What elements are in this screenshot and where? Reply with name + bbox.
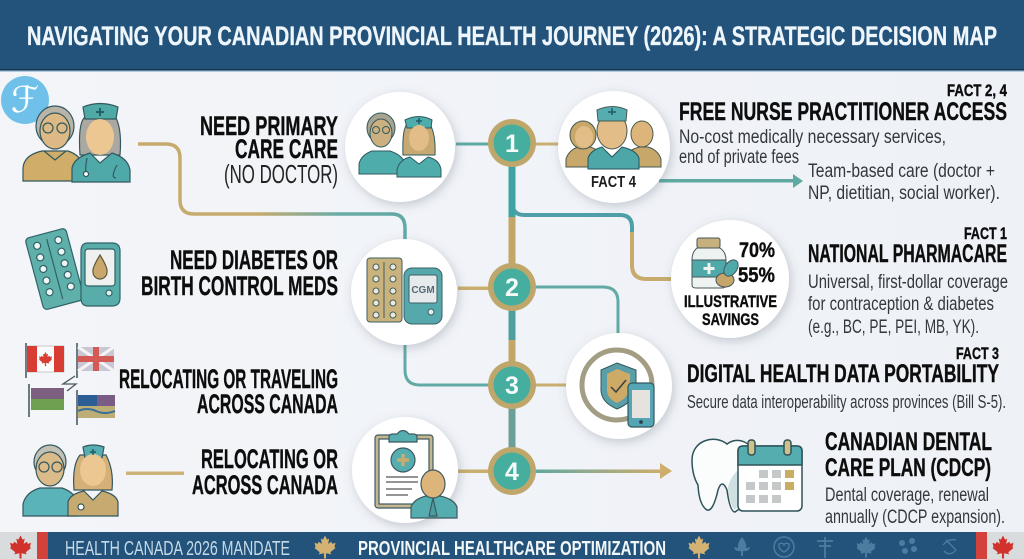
savings figures: 55%: [738, 264, 775, 287]
circle: care team fact 4: [558, 91, 670, 203]
connector: node 1 to fact 4 circle: [534, 142, 560, 146]
heading: need primary care: (NO DOCTOR): [224, 159, 338, 189]
icon: gold maple leaf right: [688, 535, 710, 559]
spine: [508, 165, 516, 450]
icon: blister and CGM: [367, 258, 442, 324]
header banner: [0, 0, 1024, 72]
circle: clipboard: [352, 417, 458, 523]
node 1: 1: [505, 130, 519, 158]
node 3: 3: [505, 372, 519, 400]
heading: relocating or across canada: ACROSS CANADA: [192, 470, 338, 500]
savings figures: SAVINGS: [702, 310, 759, 329]
text block: free nurse practitioner access: end of private fees: [679, 147, 799, 168]
savings figures: 70%: [739, 239, 775, 262]
heading: relocating or traveling: ACROSS CANADA: [197, 389, 338, 419]
node 2: 2: [505, 274, 519, 302]
text block: national pharmacare: FACT 1: [964, 224, 1007, 243]
logo badge: ℱ: [11, 80, 39, 121]
connector: row 4 left line: [126, 472, 184, 475]
icon: left maple leaf: [10, 535, 31, 559]
circle: digital data: [566, 333, 672, 439]
node 4: [488, 447, 536, 495]
heading: diabetes or birth control: BIRTH CONTROL MEDS: [141, 271, 338, 301]
heading: diabetes or birth control: [141, 245, 338, 301]
icon: clipboard with patient: [375, 430, 457, 518]
connector: circle 2 to node 2: [458, 286, 492, 290]
icon: elder and nurse, row 4: [23, 445, 118, 516]
heading: diabetes or birth control: NEED DIABETES OR: [170, 245, 338, 275]
fact 4 label: FACT 4: [591, 174, 636, 191]
flag: Ontario style: [78, 347, 114, 371]
icon: tooth and calendar: [692, 439, 802, 512]
node 2: [488, 263, 536, 311]
connector: circle 2 down to node 3: [405, 344, 492, 385]
icon: provincial flags: [25, 343, 115, 425]
text block: free nurse practitioner access: [679, 81, 1007, 204]
icon: care team: [566, 106, 661, 169]
savings figures: ILLUSTRATIVE: [684, 292, 777, 311]
connector: spine branch to pharmacare: [512, 205, 672, 279]
arrow: fact 4 to team-based care: [659, 174, 803, 188]
flag: Alberta style: [31, 388, 64, 410]
exchange bolt: [63, 376, 76, 391]
text block: canadian dental care plan: [825, 428, 1005, 528]
heading: need primary care: [200, 111, 338, 189]
icon: elder and nurse: [359, 113, 441, 177]
text block: digital health data portability: FACT 3: [956, 344, 999, 363]
heading: relocating or traveling: [119, 364, 338, 419]
savings figures: [684, 239, 777, 329]
icon: right maple leaf: [992, 535, 1014, 559]
icon: blister pack and glucose meter, row 2: [25, 228, 120, 310]
icon: shield clock and phone: [582, 350, 654, 427]
text block: digital health data portability: [687, 344, 1006, 412]
heading: need primary care: NEED PRIMARY: [200, 111, 338, 141]
text block: national pharmacare: [808, 224, 1008, 338]
arrow: node 4 to dental: [534, 463, 672, 479]
logo badge: [1, 76, 49, 124]
flag: BC style: [78, 395, 115, 418]
circle: medications: [351, 239, 457, 345]
icon: elder and nurse, row 1: [23, 104, 130, 182]
heading: relocating or traveling: RELOCATING OR TRAVELING: [119, 364, 338, 394]
heading: need primary care: CARE CARE: [235, 134, 338, 164]
node 4: 4: [505, 458, 519, 486]
connector: circle 4 to node 4: [458, 470, 492, 473]
circle: primary care: [345, 92, 455, 202]
node 1: [488, 119, 536, 167]
circle: pharmacare savings: [671, 220, 789, 338]
connector: circle 1 to node 1: [456, 142, 492, 146]
flag: Canada: [27, 346, 64, 372]
text block: free nurse practitioner access: FACT 2, 4: [947, 81, 1007, 100]
CGM label: CGM: [411, 285, 435, 296]
connector: node 2 to digital circle: [534, 287, 618, 336]
icon: gold maple leaf: [314, 535, 336, 559]
footer banner: [0, 532, 1024, 559]
node 3: [488, 361, 536, 409]
text block: free nurse practitioner access: No-cost medically necessary services,: [679, 127, 946, 148]
heading: relocating or across canada: RELOCATING OR: [201, 444, 338, 474]
icons: faint health symbols: [734, 537, 956, 558]
heading: relocating or across canada: [192, 444, 338, 500]
connector: row 1 icon to circle 2: [138, 144, 405, 240]
connector: node 3 to digital circle: [534, 384, 566, 386]
icon: medicine jar: [692, 238, 741, 288]
